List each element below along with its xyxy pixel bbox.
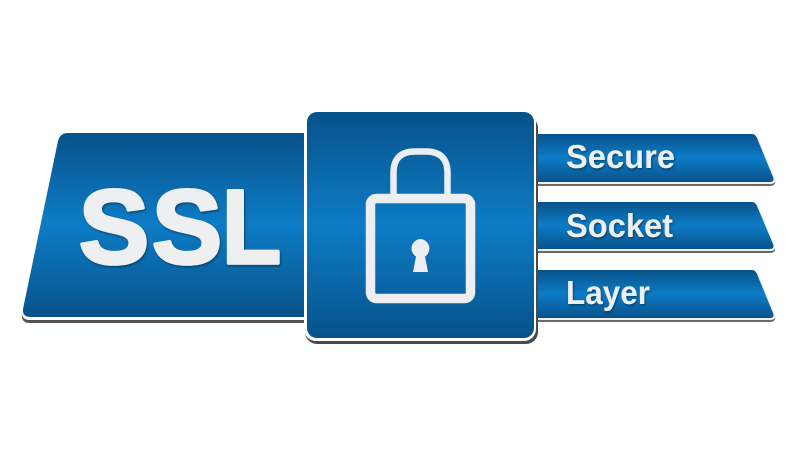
icon: keyhole: [412, 239, 429, 272]
panel: Layer: [530, 270, 775, 322]
icon: padlock: [370, 152, 470, 298]
panel: Socket: [530, 202, 775, 253]
heading: SSL: L: [222, 169, 281, 286]
panel: SSL: [22, 133, 305, 323]
heading: SSL: SS: [79, 169, 222, 286]
label: Layer: Layer: [566, 274, 650, 311]
label: Socket: Socket: [566, 207, 673, 244]
panel: Secure: [530, 134, 775, 186]
label: Secure: Secure: [566, 138, 675, 175]
panel: lock: [304, 110, 538, 344]
